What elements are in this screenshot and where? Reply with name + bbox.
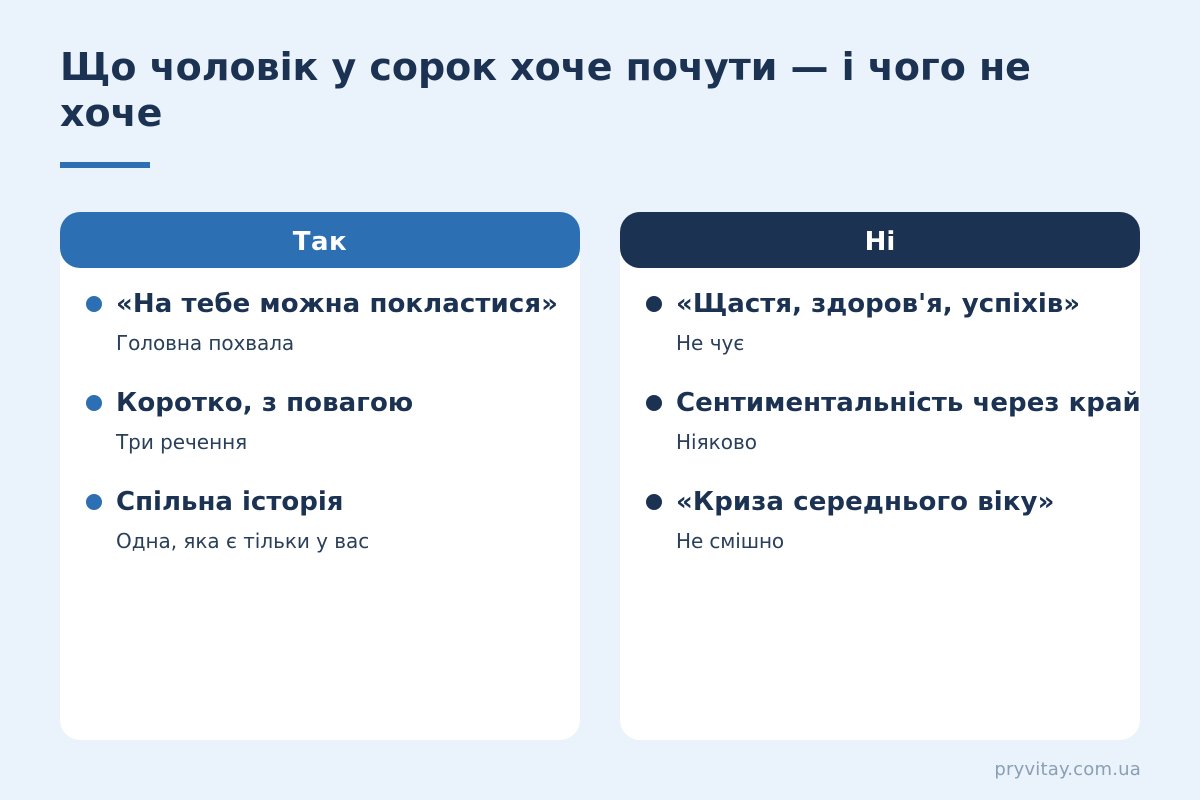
panel heading: Так (60, 212, 580, 268)
item note: Не чує (676, 331, 744, 355)
item note: Ніяково (676, 430, 757, 454)
bullet (646, 494, 662, 510)
bullet (86, 395, 102, 411)
item heading: Спільна історія (116, 487, 343, 517)
panel heading: Так: Так (293, 227, 347, 257)
title accent underline (60, 162, 150, 168)
bullet (86, 494, 102, 510)
panel heading: Ні (620, 212, 1140, 268)
bullet (646, 296, 662, 312)
list item 1 (86, 289, 558, 355)
item note: Не смішно (676, 529, 784, 553)
list item 3 (86, 487, 369, 553)
item note: Одна, яка є тільки у вас (116, 529, 369, 553)
footer source: pryvitay.com.ua (994, 759, 1141, 780)
bullet (86, 296, 102, 312)
panel: Ні (620, 212, 1140, 740)
panel heading: Ні: Ні (865, 227, 895, 257)
title: Що чоловік у сорок хоче почути — і чого не хоче (60, 45, 1031, 135)
panel: Так (60, 212, 580, 740)
bullet (646, 395, 662, 411)
item note: Три речення (116, 430, 247, 454)
list item 2 (86, 388, 413, 454)
list item 1 (646, 289, 1080, 355)
list item 3 (646, 487, 1054, 553)
item note: Головна похвала (116, 331, 294, 355)
item heading: Коротко, з повагою (116, 388, 413, 418)
item heading: «Щастя, здоров'я, успіхів» (676, 289, 1080, 319)
list item 2 (646, 388, 1141, 454)
item heading: Сентиментальність через край (676, 388, 1141, 418)
item heading: «Криза середнього віку» (676, 487, 1054, 517)
item heading: «На тебе можна покластися» (116, 289, 558, 319)
